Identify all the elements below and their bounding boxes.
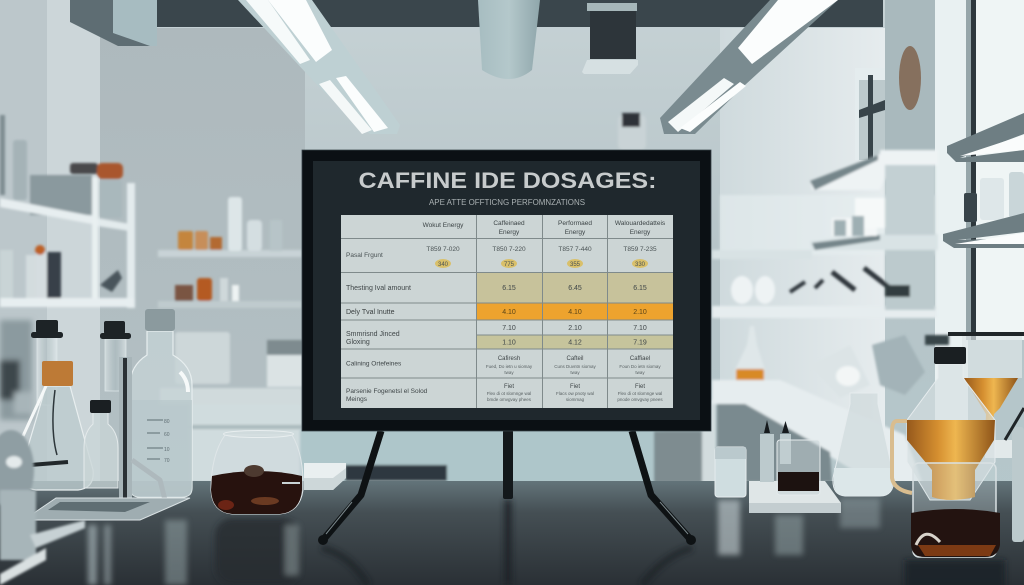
row: personal fragmented and salad mixings (346, 384, 663, 403)
row: pasal frequent: 355 (570, 262, 581, 268)
row: summarised mixed dosing: Gloxing (346, 339, 370, 346)
row: daily total intake (346, 309, 647, 316)
background amber funnel (948, 332, 1024, 458)
dropper bottles (760, 420, 791, 482)
row: personal fragmented and salad mixings: Parsenie Fogenetsl el Solod (346, 388, 428, 395)
row: personal fragmented and salad mixings: Flacs ow pnoty wal (556, 391, 594, 396)
row: pasal frequent: 340 (438, 262, 449, 268)
row: pasal frequent: T857 7-440 (558, 246, 592, 253)
row: pasal frequent: T859 7-020 (426, 246, 460, 253)
orange-capped flask (21, 361, 93, 490)
subtitle: APE ATTE OFFTICNG PERFOMNZATIONS (429, 198, 585, 207)
row: pasal frequent: Pasal Frgunt (346, 252, 383, 259)
row: resting total amount: 6.15 (633, 285, 647, 292)
row: personal fragmented and salad mixings: Fiet (635, 384, 645, 390)
small wall fixture (618, 113, 646, 150)
table header row: Walouardedatteis (615, 220, 666, 227)
conical glass flask (833, 393, 894, 496)
large graduated bottle: 80 (164, 419, 170, 425)
duct (478, 0, 540, 79)
row: resting total amount: 6.15 (502, 285, 516, 292)
row: daily total intake: Dely Tval Inutte (346, 309, 395, 316)
large graduated bottle: 70 (164, 458, 170, 464)
row: calming definitions: tway (504, 370, 514, 375)
row: personal fragmented and salad mixings: Flex di ot slomnge wal (487, 391, 531, 396)
wall behind board base (300, 430, 664, 482)
table header row (423, 220, 666, 236)
lower coffee vessel (911, 463, 1000, 557)
small jar (715, 447, 746, 497)
table header row: Caffeinaed (493, 220, 525, 227)
row: summarised mixed dosing: 4.12 (568, 340, 582, 346)
row: calming definitions: Cafiresh (498, 356, 520, 362)
row: pasal frequent: 775 (504, 262, 515, 268)
row: calming definitions: Calining Ortefeines (346, 360, 402, 368)
table header row: Energy (630, 229, 651, 236)
distant amber flask (735, 326, 765, 384)
table header row: Energy (565, 229, 586, 236)
row: calming definitions (346, 356, 661, 375)
chalkboard panel (302, 150, 711, 431)
bottle: capped tube middle (100, 321, 131, 391)
ceiling lights (238, 0, 838, 134)
row: daily total intake: 4.10 (568, 309, 582, 316)
wall shelf upper (947, 113, 1024, 162)
row: pasal frequent: T859 7-235 (623, 246, 657, 253)
easel stand (318, 430, 696, 545)
side window (855, 68, 885, 160)
row: summarised mixed dosing: 1.10 (502, 340, 516, 346)
back shelves (158, 197, 716, 484)
wall shelf lower (943, 213, 1024, 248)
left glassware group (0, 309, 192, 585)
large graduated bottle: 60 (164, 432, 170, 438)
row: personal fragmented and salad mixings: Flex di ot slomnge wal (618, 391, 662, 396)
row: calming definitions: tway (570, 370, 580, 375)
row: daily total intake: 2.10 (633, 309, 647, 316)
table header row: Wokut Energy (423, 222, 464, 229)
row: calming definitions: Caffiael (630, 356, 650, 362)
microscope (810, 345, 870, 398)
title: CAFFINE IDE DOSAGES: (358, 168, 656, 193)
wall clock (899, 46, 921, 110)
row: personal fragmented and salad mixings: pnode omvgvay pnees (617, 397, 663, 402)
row: calming definitions: Cuns Duvntn siomay (554, 364, 597, 369)
bottle: capped tube left (31, 320, 63, 405)
table header row: Performaed (558, 220, 592, 227)
row: resting total amount (346, 285, 647, 292)
counter at right (712, 380, 925, 490)
row: summarised mixed dosing (346, 325, 647, 346)
white scale platform (749, 481, 841, 513)
bottles on wall shelf (964, 193, 977, 222)
row: pasal frequent: T850 7-220 (492, 246, 526, 253)
row: summarised mixed dosing: Smmrisnd Jinced (346, 331, 400, 338)
ceiling unit (70, 0, 157, 46)
small stack: white blocks (304, 463, 346, 490)
row: personal fragmented and salad mixings: Meings (346, 396, 368, 403)
left shelves (0, 115, 135, 308)
small round flask (84, 400, 118, 488)
dosage table (341, 215, 673, 408)
row: personal fragmented and salad mixings: Fiet (570, 384, 580, 390)
beaker with coffee beans (211, 430, 303, 514)
row: resting total amount: 6.45 (568, 285, 582, 292)
beaker dark liquid (777, 440, 820, 495)
bench reflections (88, 498, 1005, 585)
white box right edge (1005, 408, 1024, 542)
row: calming definitions: Foun Do ietn siomay (619, 364, 661, 369)
row: personal fragmented and salad mixings: siommag (566, 397, 585, 402)
row: summarised mixed dosing: 2.10 (568, 325, 582, 332)
row: pasal frequent (346, 246, 657, 268)
right glassware group (715, 332, 1024, 557)
row: personal fragmented and salad mixings: bmde omvgvay phees (487, 397, 532, 402)
blurred background equipment left (0, 320, 34, 420)
row: calming definitions: Cafteil (566, 356, 584, 362)
row: pasal frequent: 330 (635, 262, 646, 268)
metal stand (31, 357, 190, 520)
right shelves (712, 113, 1024, 490)
row: personal fragmented and salad mixings: Fiet (504, 384, 514, 390)
row: daily total intake: 4.10 (502, 309, 516, 316)
row: summarised mixed dosing: 7.10 (502, 325, 516, 332)
row: calming definitions: tway (635, 370, 645, 375)
large graduated bottle (130, 309, 192, 497)
ceiling (155, 0, 883, 27)
large graduated bottle: 10 (164, 447, 170, 453)
blurred foreground flask (0, 430, 85, 585)
row: summarised mixed dosing: 7.19 (633, 340, 647, 346)
wall device (587, 3, 637, 11)
large amber carafe (892, 347, 995, 500)
bench top (0, 481, 1024, 585)
row: resting total amount: Thesting Ival amount (346, 285, 411, 292)
table header row: Energy (499, 229, 520, 236)
row: calming definitions: Fued, Do ietn u siomay (486, 364, 533, 369)
row: summarised mixed dosing: 7.10 (633, 325, 647, 332)
